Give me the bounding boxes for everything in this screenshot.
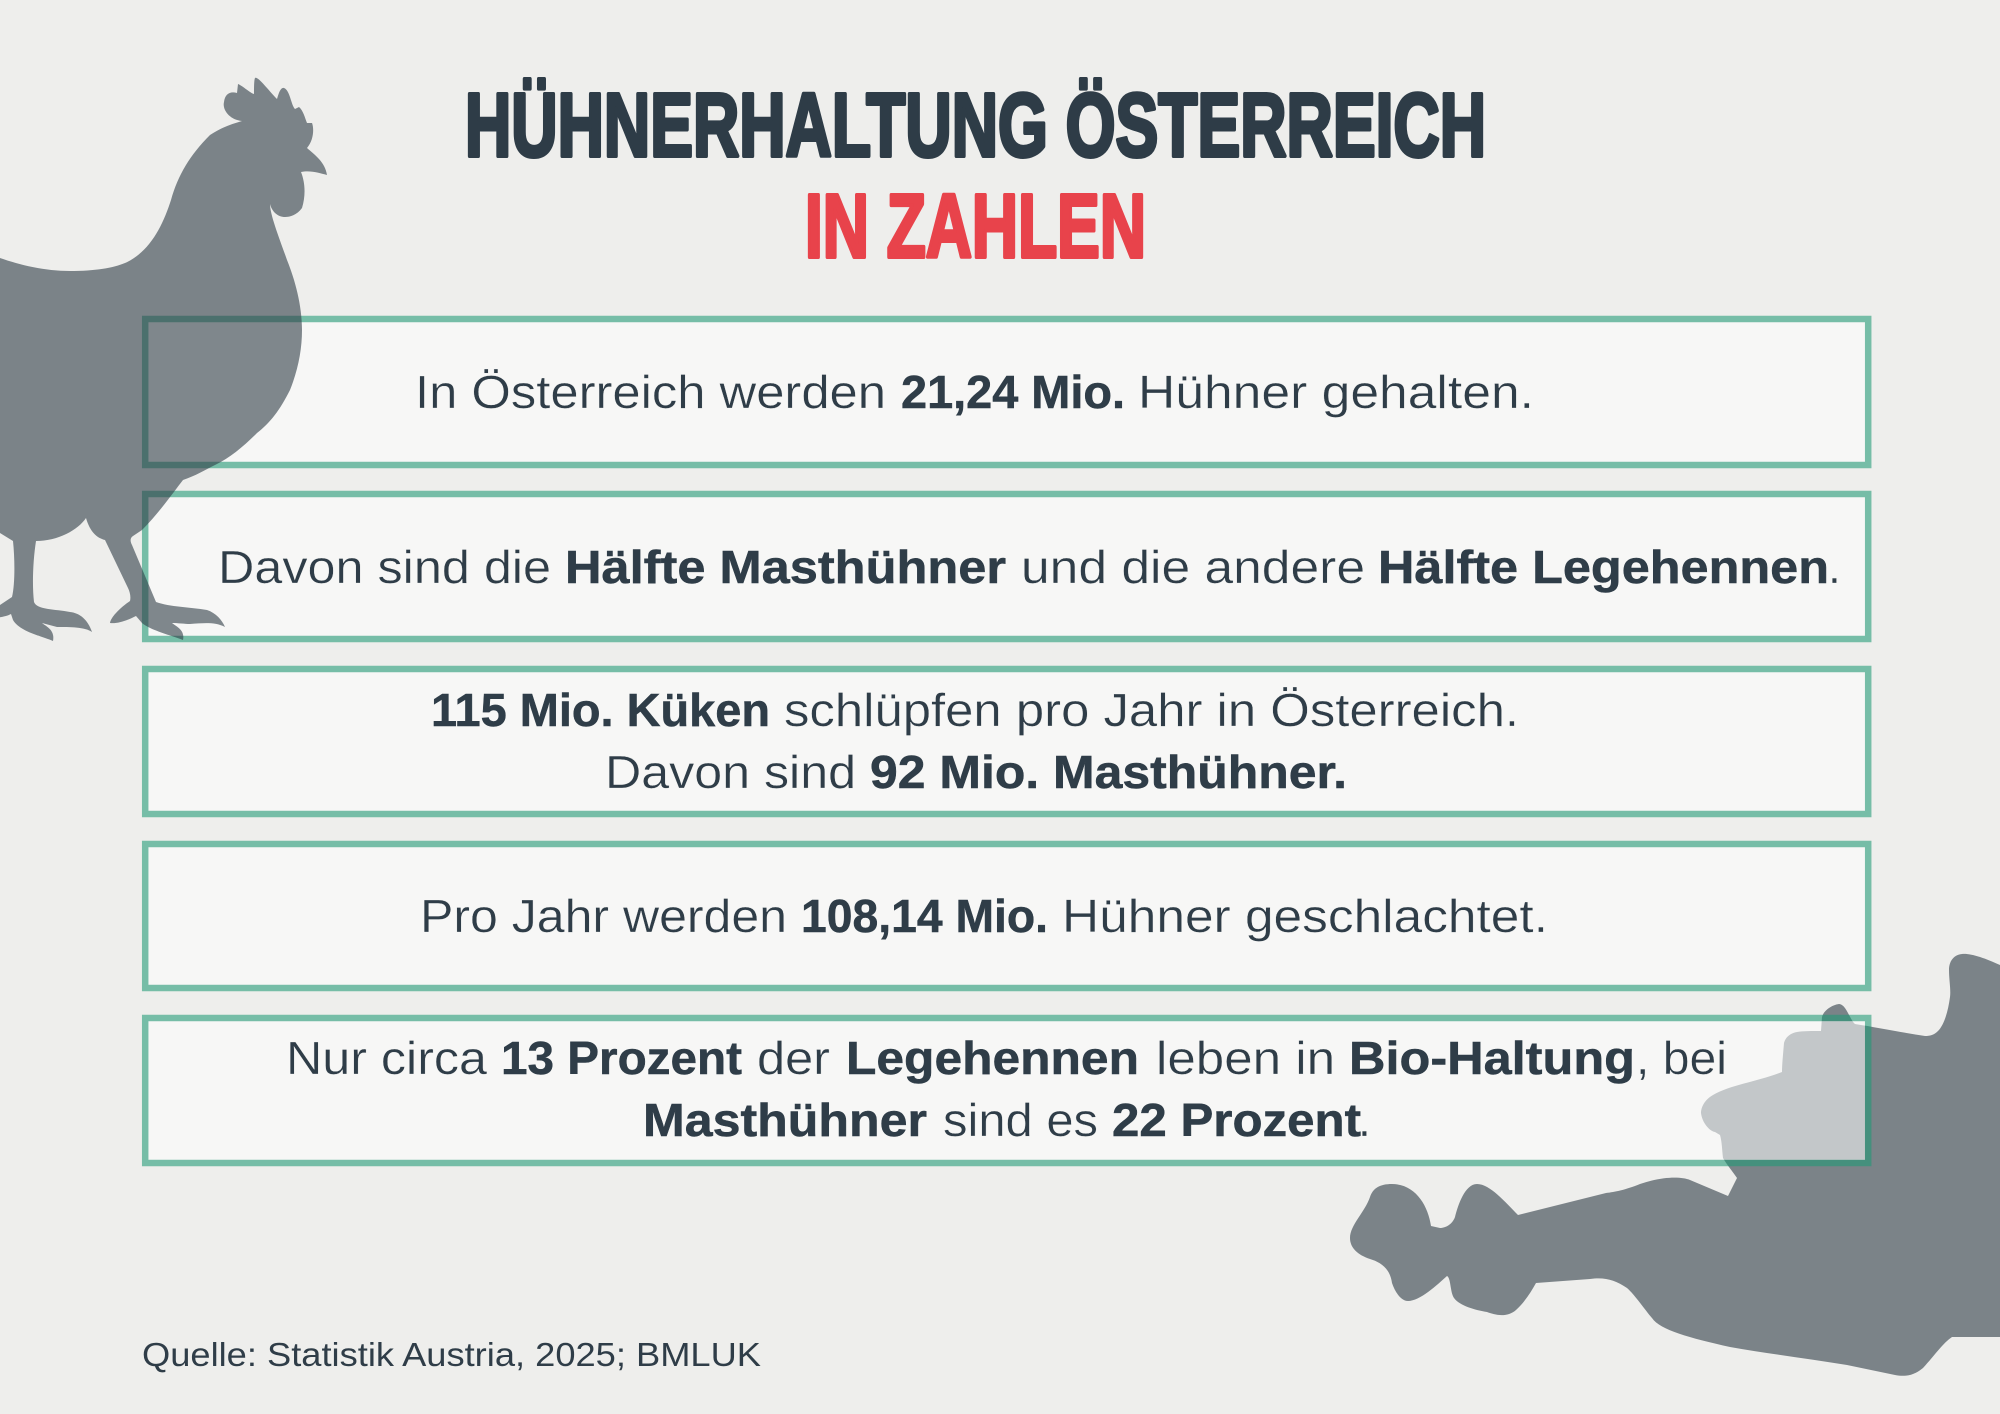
panel: slaughtered per year: Hühner geschlachtet. [1062, 890, 1548, 942]
panel: chicks hatched per year: schlüpfen pro Jahr in Österreich. [784, 684, 1519, 736]
panel: half broilers, half layers: Davon sind die [218, 541, 551, 593]
panel: organic share: sind es [943, 1094, 1098, 1146]
panel: organic share: der [757, 1032, 830, 1084]
panel: total number of chickens: 21,24 Mio. [901, 366, 1125, 418]
panel: half broilers, half layers: und die andere [1021, 541, 1365, 593]
panel: slaughtered per year: Pro Jahr werden [420, 890, 787, 942]
map silhouette: Austria [1350, 954, 2000, 1376]
source note: Quelle: Statistik Austria, 2025; BMLUK [142, 1336, 761, 1373]
panel: total number of chickens: In Österreich werden [415, 366, 886, 418]
panel: chicks hatched per year [145, 669, 1868, 814]
panel: half broilers, half layers: . [1828, 541, 1841, 593]
panel: organic share: 22 Prozent [1112, 1094, 1361, 1146]
title line 1: HÜHNERHALTUNG ÖSTERREICH [465, 76, 1486, 176]
panel: half broilers, half layers: Hälfte Masthühner [565, 541, 1006, 593]
panel: organic share: leben in [1156, 1032, 1335, 1084]
panel: chicks hatched per year: 115 Mio. Küken [431, 684, 770, 736]
panel: half broilers, half layers [145, 494, 1868, 639]
panel: chicks hatched per year: 92 Mio. Masthühner. [870, 746, 1347, 798]
panel: slaughtered per year [145, 844, 1868, 988]
panel: organic share: 13 Prozent [501, 1032, 742, 1084]
panel: organic share: Masthühner [643, 1094, 927, 1146]
panel: half broilers, half layers: Hälfte Legehennen [1378, 541, 1829, 593]
icon: chicken silhouette [0, 78, 327, 641]
panel: total number of chickens: Hühner gehalten. [1138, 366, 1534, 418]
panel: total number of chickens [145, 319, 1868, 465]
panel: organic share [145, 1018, 1868, 1163]
title [465, 76, 1486, 277]
panel: organic share: . [1358, 1094, 1371, 1146]
panel: slaughtered per year: 108,14 Mio. [801, 890, 1048, 942]
panel: organic share: , bei [1636, 1032, 1727, 1084]
panel: chicks hatched per year: Davon sind [605, 746, 856, 798]
panel: organic share: Bio-Haltung [1349, 1032, 1635, 1084]
title line 2: IN ZAHLEN [805, 177, 1146, 277]
panel: organic share: Nur circa [286, 1032, 487, 1084]
panel: organic share: Legehennen [846, 1032, 1139, 1084]
